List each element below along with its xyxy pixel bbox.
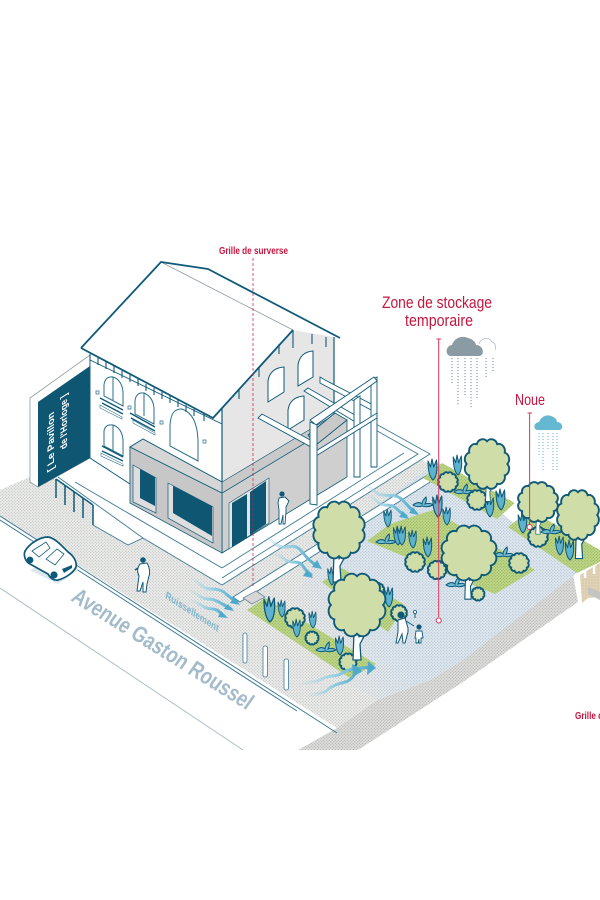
kerb lines	[0, 516, 337, 733]
small shop window	[133, 465, 156, 513]
tree A	[313, 502, 365, 582]
gable windows	[268, 351, 313, 430]
ground: right soil section	[580, 563, 600, 603]
plants: bed 4	[518, 513, 574, 560]
callout: grille de surverse: Grille de surverse	[219, 246, 288, 257]
eave brackets	[90, 330, 326, 421]
callout: zone de stockage temporaire: temporaire	[405, 311, 473, 330]
label: street name: Avenue Gaston Roussel	[67, 583, 259, 714]
flow: top right	[362, 483, 419, 519]
fence	[56, 479, 93, 525]
person by the door	[278, 491, 289, 524]
callout: zone de stockage temporaire: Zone de stockage	[382, 293, 492, 312]
billboard name: de l'Horloge ]	[60, 391, 70, 452]
ground: base slab	[298, 575, 578, 750]
illustration: isometric street scene	[0, 246, 600, 750]
icon: blue cloud with rain	[534, 415, 562, 472]
car	[24, 537, 78, 584]
billboard name	[47, 391, 70, 474]
callout: zone de stockage temporaire	[382, 293, 492, 623]
upper windows	[96, 377, 206, 466]
left white facade	[90, 360, 222, 484]
plants: bed around first tree	[328, 567, 407, 621]
billboard name: [ Le Pavillon	[47, 409, 57, 474]
flow: left	[188, 578, 240, 618]
door	[229, 478, 269, 549]
icon: storm cloud with rain	[447, 337, 483, 408]
ground: storage plaza	[318, 462, 577, 696]
water flow arrows	[188, 483, 419, 618]
gray block	[130, 447, 222, 553]
large shop window	[168, 483, 213, 543]
callout: noue	[515, 392, 545, 530]
roof	[81, 262, 340, 421]
storm grate	[243, 591, 265, 604]
ground: pavement	[0, 440, 577, 728]
flow: near door	[262, 537, 322, 578]
tree E	[518, 482, 558, 534]
building plinth	[50, 380, 446, 602]
tree C	[442, 526, 496, 599]
building	[81, 262, 347, 553]
bollards	[243, 633, 288, 690]
ground: road outer edge	[0, 588, 243, 750]
billboard	[30, 355, 90, 487]
pergola roof	[308, 413, 347, 445]
tree D	[465, 439, 509, 501]
right band	[222, 415, 334, 493]
tree F	[557, 490, 599, 559]
planting beds	[247, 463, 600, 678]
gable wall	[222, 330, 334, 482]
pergola	[258, 377, 377, 505]
plants: bed 1	[264, 597, 356, 670]
icon: outline cloud with rain	[479, 338, 496, 377]
label: ruissellement: Ruissellement	[164, 590, 220, 635]
tree B	[329, 574, 385, 660]
flow: bottom	[297, 661, 376, 698]
family: adult and child	[396, 610, 423, 643]
plants: bed 3	[428, 455, 505, 517]
plants: bed 2	[376, 495, 529, 601]
pedestrian on pavement	[135, 557, 150, 592]
callout: noue: Noue	[515, 392, 545, 409]
right lower wall	[222, 420, 347, 553]
